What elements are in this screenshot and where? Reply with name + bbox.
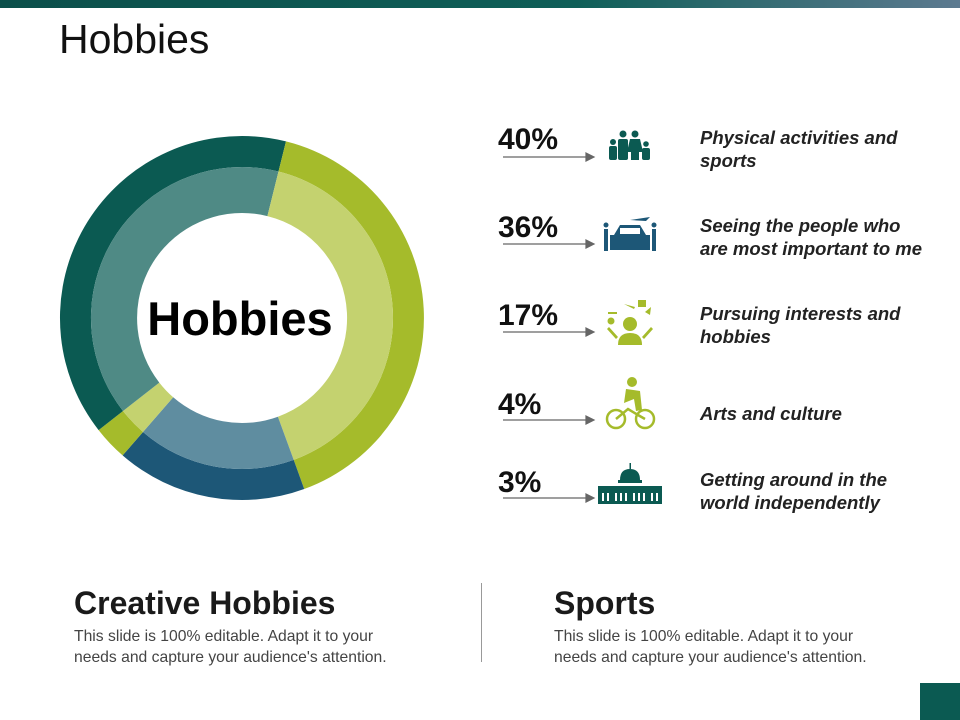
percentages bbox=[498, 123, 558, 499]
text block: sports: Sports bbox=[554, 585, 655, 621]
corner square bbox=[920, 683, 960, 720]
arrows and icons bbox=[503, 130, 662, 504]
text: Pursuing interests and hobbies bbox=[700, 303, 900, 347]
stat rows: 3% bbox=[498, 466, 541, 499]
text block: creative hobbies bbox=[74, 585, 387, 666]
stat rows: 17% bbox=[498, 299, 558, 332]
donut inner ring bbox=[91, 167, 393, 469]
stat rows: 4% bbox=[498, 388, 541, 421]
text block: creative hobbies: This slide is 100% editable. Adapt it to your needs and capture your audience's attention. bbox=[74, 628, 387, 666]
stat rows bbox=[498, 123, 558, 499]
top bar bbox=[0, 0, 960, 8]
stat rows: 36% bbox=[498, 211, 558, 244]
text: Getting around in the world independently bbox=[700, 469, 887, 513]
stat rows: 40% bbox=[498, 123, 558, 156]
text block: sports: This slide is 100% editable. Adapt it to your needs and capture your audience's attention. bbox=[554, 628, 867, 666]
icon: car and people bbox=[604, 217, 656, 251]
icon: cyclist bbox=[607, 409, 654, 428]
text block: sports bbox=[554, 585, 867, 666]
labels: Physical activities and sports bbox=[700, 127, 897, 171]
donut center label: Hobbies bbox=[147, 292, 333, 345]
text block: creative hobbies: Creative Hobbies bbox=[74, 585, 335, 621]
icon: capitol building bbox=[598, 463, 662, 504]
text: Seeing the people who are most important to me bbox=[700, 215, 922, 259]
title: Hobbies bbox=[59, 16, 209, 62]
text: Arts and culture bbox=[700, 403, 842, 424]
donut chart bbox=[60, 136, 424, 500]
icon: family bbox=[609, 130, 650, 160]
icon: juggling person bbox=[607, 300, 653, 345]
donut outer ring bbox=[60, 136, 424, 500]
